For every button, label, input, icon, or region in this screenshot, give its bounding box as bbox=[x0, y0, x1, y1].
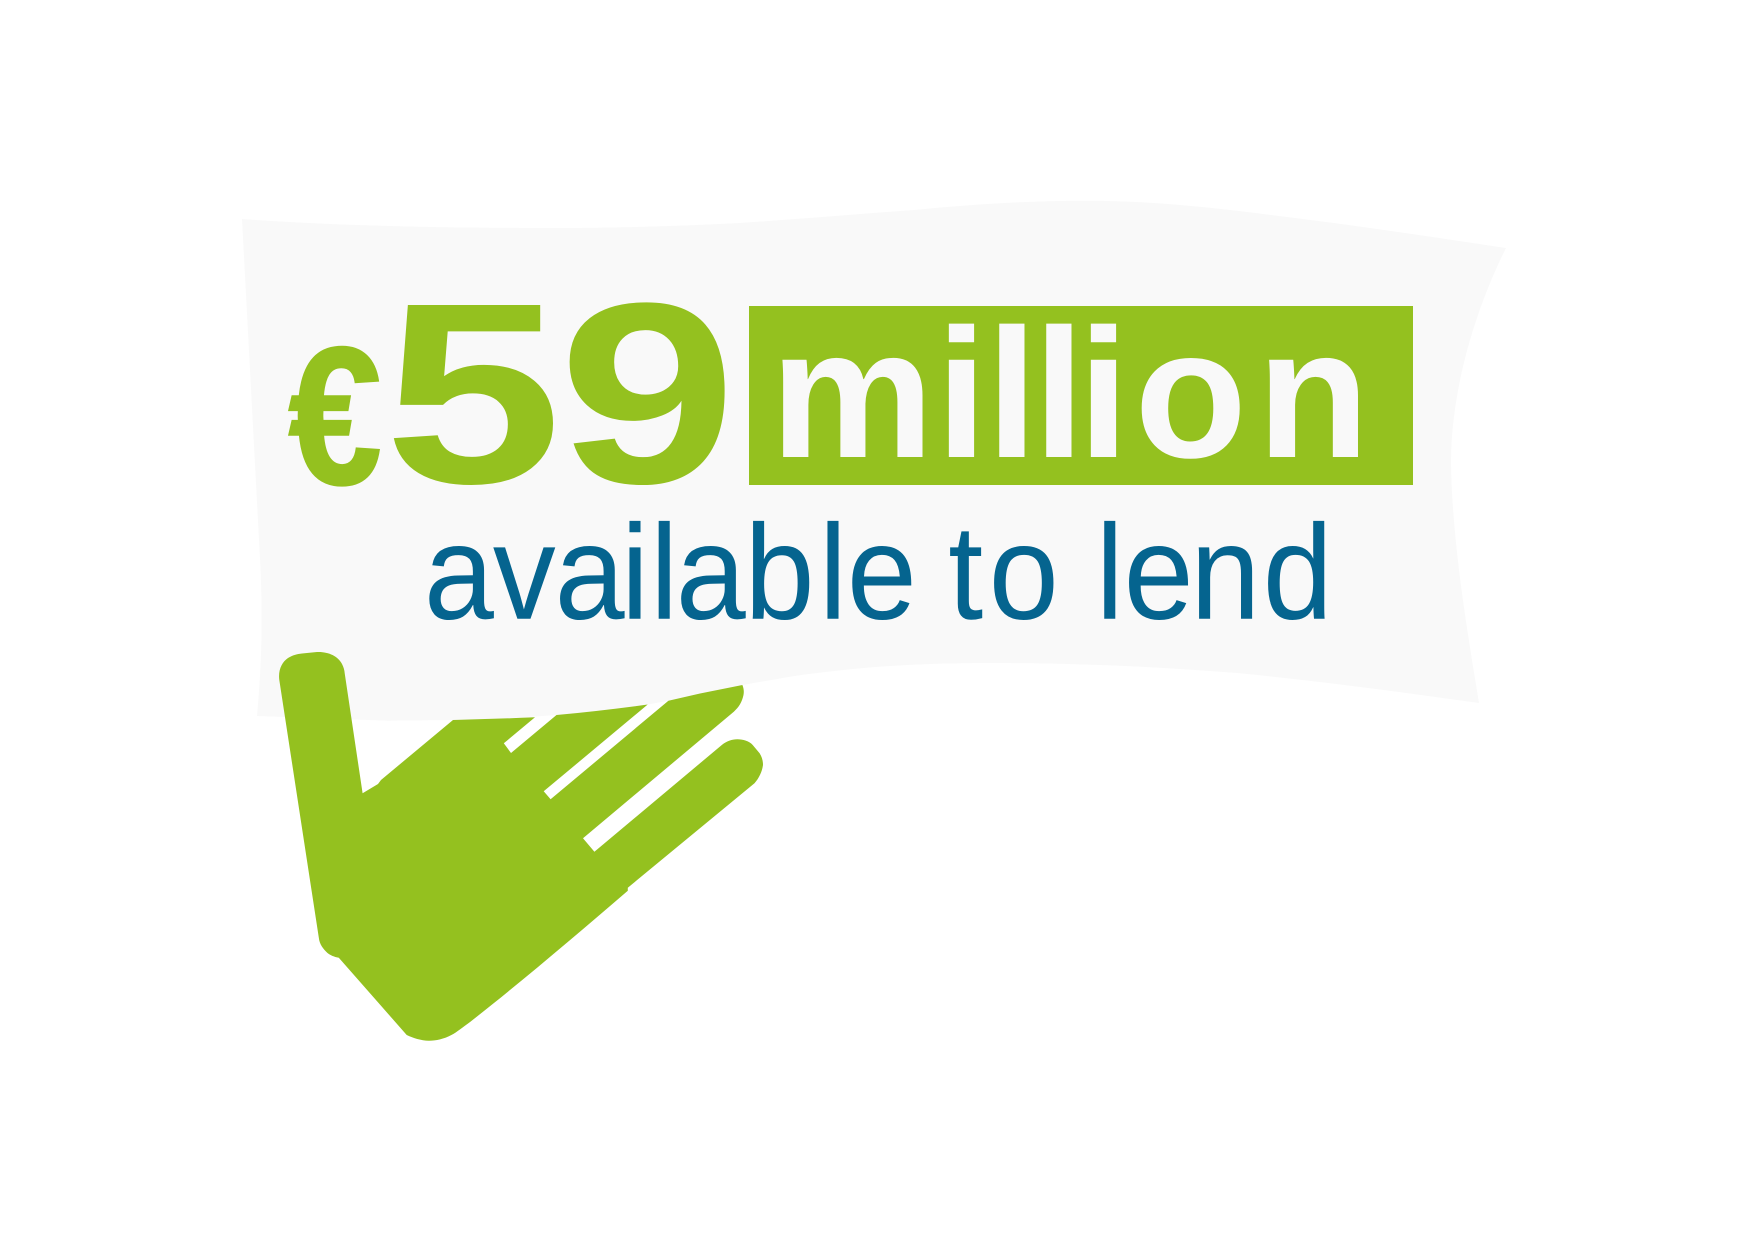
panel: million label bbox=[749, 290, 1413, 496]
banner flag bbox=[242, 201, 1506, 721]
euro sign: € bbox=[288, 306, 382, 526]
green box bbox=[749, 306, 1413, 485]
icon: hand holding banner bbox=[279, 652, 763, 1041]
number 59: 59 bbox=[384, 249, 736, 538]
subheading: available to lend: available to lend bbox=[424, 497, 1333, 648]
word: million: million bbox=[770, 290, 1369, 496]
heading: euro amount bbox=[288, 249, 736, 538]
